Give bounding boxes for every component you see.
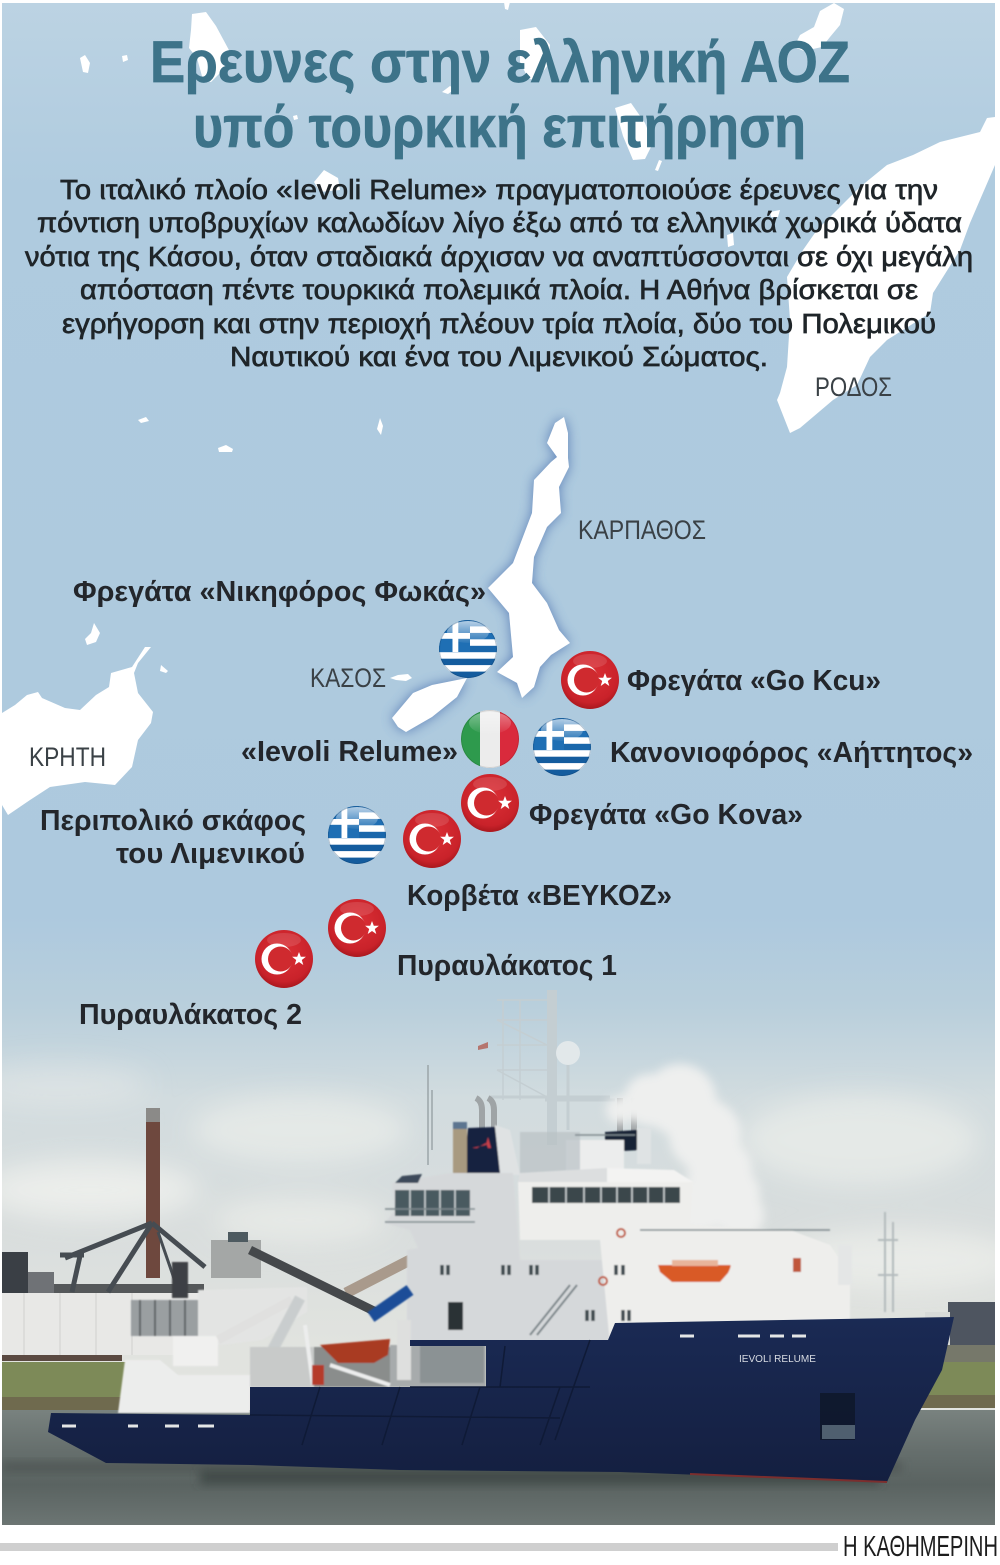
left bridge windows: [395, 1190, 470, 1216]
rails: [385, 1135, 830, 1230]
place labels: ΡΟΔΟΣ: [815, 372, 892, 402]
intro text block: [25, 174, 973, 372]
green shore: [2, 1362, 127, 1400]
logo on funnel: [472, 1137, 491, 1148]
stairs: [530, 1285, 577, 1335]
exhaust pipes: [476, 1098, 634, 1132]
vessel: corvette Beykoz: Κορβέτα «ΒΕΥΚΟΖ»: [407, 880, 672, 912]
vessel: frigate Go Kova: Φρεγάτα «Go Kova»: [529, 799, 803, 831]
blue ramp: [371, 1290, 410, 1317]
island: Kasos islet: [390, 674, 412, 681]
aft deck crane and equipment: [118, 1262, 486, 1413]
orange lifeboat: [658, 1265, 731, 1282]
chimney: [146, 1108, 160, 1278]
ship hull: [48, 1317, 954, 1482]
vessel: missile boat 2: [79, 930, 313, 1031]
intro text block: νότια της Κάσου, όταν σταδιακά άρχισαν να αναπτύσσονται σε όχι μεγάλη: [25, 241, 973, 272]
place labels: ΚΡΗΤΗ: [29, 742, 106, 772]
vessel: frigate Go Kova: [461, 774, 803, 832]
vessel: Ievoli Relume: [241, 709, 520, 769]
vessel: coast guard patrol boat: [40, 805, 387, 870]
silo tower: [211, 1232, 261, 1278]
photo: sky clouds and shore: [0, 990, 1000, 1525]
shadow glow around Karpathos and Kasos: [392, 417, 570, 732]
ship superstructure: [385, 1122, 898, 1345]
vessel: missile boat 1: Πυραυλάκατος 1: [397, 950, 617, 982]
title: υπό τουρκική επιτήρηση: [193, 95, 806, 160]
island: Rhodes: [777, 117, 995, 433]
vessel: frigate Go Kcu: Φρεγάτα «Go Kcu»: [627, 665, 881, 697]
map: islands: [2, 2, 995, 815]
vessel: gunboat Aittitos: Κανονιοφόρος «Αήττητος»: [610, 737, 973, 769]
place labels: ΚΑΣΟΣ: [310, 663, 386, 693]
water: [2, 1410, 995, 1525]
vessel: missile boat 1: [328, 899, 617, 982]
vessel: coast guard patrol boat: Περιπολικό σκάφος: [40, 805, 306, 837]
island: Kasos: [392, 678, 467, 732]
intro text block: Ναυτικού και ένα του Λιμενικού Σώματος.: [230, 341, 768, 372]
intro text block: απόσταση πέντε τουρκικά πολεμικά πλοία. Η Αθήνα βρίσκεται σε: [80, 274, 918, 305]
door: [448, 1302, 463, 1330]
vessel: missile boat 2: Πυραυλάκατος 2: [79, 999, 302, 1031]
life rings: [617, 1229, 625, 1237]
bridge roof: [520, 1168, 607, 1175]
vessel: frigate Nikiforos Fokas: [73, 576, 498, 679]
title: [150, 30, 850, 160]
conveyors: [346, 1260, 410, 1293]
intro text block: εγρήγορση και στην περιοχή πλέουν τρία πλοία, δύο του Πολεμικού: [62, 308, 936, 339]
vessel: Ievoli Relume: «Ievoli Relume»: [241, 736, 458, 768]
rear navy housing: [605, 1130, 640, 1152]
islands: Aegean islets behind the title: [80, 2, 844, 247]
island: islets near Crete: [85, 417, 383, 673]
funnel and upper housing: [495, 1125, 520, 1175]
steam cloud: [606, 1064, 764, 1239]
footer bar: [0, 1543, 838, 1551]
bridge window mullions: [410, 1187, 664, 1216]
forward side block (sunlit): [518, 1182, 850, 1345]
red workboat: [320, 1339, 390, 1363]
beige stack: [453, 1122, 467, 1174]
hull panel lines: [250, 1340, 590, 1445]
flag: [478, 1042, 488, 1050]
anchor recess: [820, 1393, 855, 1440]
vessel: corvette Beykoz: [403, 810, 672, 912]
intro text block: Το ιταλικό πλοίο «Ievoli Relume» πραγματοποιούσε έρευνες για την: [60, 174, 938, 205]
factory building: [2, 1293, 198, 1328]
vessel: frigate Nikiforos Fokas: Φρεγάτα «Νικηφόρος Φωκάς»: [73, 576, 486, 608]
stern side block (grey, shaded): [394, 1172, 608, 1340]
title: Ερευνες στην ελληνική ΑΟΖ: [150, 30, 850, 95]
hull side lights: [62, 1336, 806, 1426]
tripod crane: [60, 1223, 205, 1292]
place labels: [29, 372, 892, 772]
intro text block: πόντιση υποβρυχίων καλωδίων λίγο έξω από τα ελληνικά χωρικά ύδατα: [37, 207, 962, 238]
island: Crete: [2, 647, 153, 815]
forward mast on bow: [878, 1212, 898, 1312]
radar dome: [556, 1041, 580, 1065]
island: Karpathos: [488, 417, 570, 698]
vessel: frigate Go Kcu: [561, 651, 881, 709]
vessel: coast guard patrol boat: του Λιμενικού: [116, 838, 305, 870]
waterline red: [690, 1474, 887, 1482]
clouds: [0, 1065, 1000, 1290]
ship name: IEVOLI RELUME: [739, 1353, 816, 1365]
mast and antenna: [428, 990, 615, 1165]
funnel navy: [463, 1127, 500, 1173]
distant building on the right: [948, 1302, 995, 1345]
small windows: [442, 1265, 629, 1321]
vessel: gunboat Aittitos: [532, 717, 973, 777]
main bridge windows: [532, 1187, 680, 1203]
place labels: ΚΑΡΠΑΘΟΣ: [578, 515, 706, 545]
